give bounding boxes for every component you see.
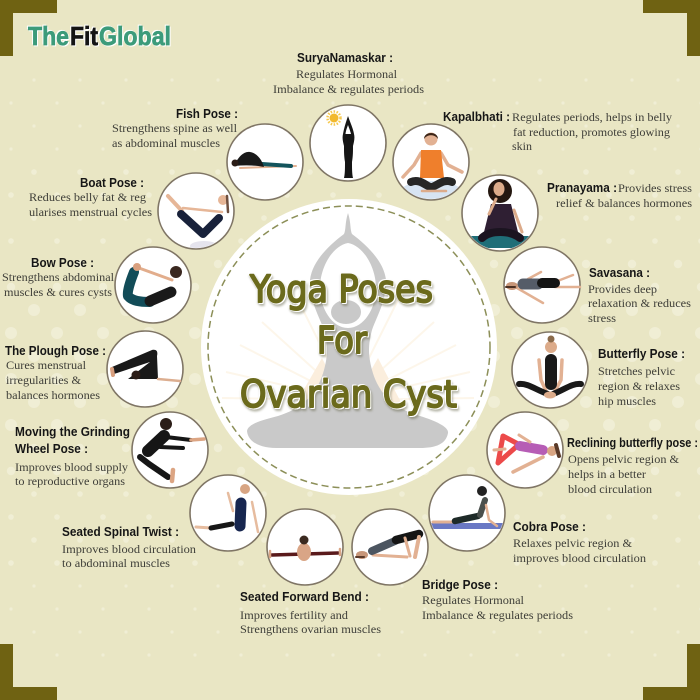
- text: Reduces belly fat & reg: [29, 190, 146, 204]
- text: Cures menstrual: [6, 358, 87, 372]
- icon: bow pose: [115, 247, 191, 323]
- panel: Seated Spinal Twist: [62, 475, 266, 570]
- title: Yoga Poses: [249, 268, 433, 311]
- title: For: [317, 319, 368, 362]
- logo: [28, 21, 171, 51]
- text: [15, 424, 130, 488]
- text: Wheel Pose :: [15, 441, 88, 456]
- text: Bow Pose :: [31, 255, 94, 270]
- central medallion: [201, 199, 497, 495]
- text: [598, 346, 685, 408]
- icon: pranayama: [462, 175, 538, 251]
- text: irregularities &: [6, 373, 82, 387]
- text: Provides stress: [618, 181, 692, 195]
- icon: seated spinal twist: [190, 475, 266, 551]
- icon: kapalbhati: [393, 124, 469, 200]
- text: Stretches pelvic: [598, 364, 675, 378]
- text: Improves blood circulation: [62, 542, 196, 556]
- text: SuryaNamaskar :: [297, 50, 393, 65]
- icon: seated forward bend: [267, 509, 343, 585]
- panel: Seated Forward Bend: [240, 509, 381, 636]
- text: Strengthens ovarian muscles: [240, 622, 381, 636]
- text: Opens pelvic region &: [568, 452, 680, 466]
- text: The Plough Pose :: [5, 343, 106, 358]
- text: [422, 577, 573, 622]
- text: Strengthens abdominal: [2, 270, 115, 284]
- text: Butterfly Pose :: [598, 346, 685, 361]
- icon: standing salute with sun: [310, 105, 386, 181]
- panel: SuryaNamaskar: [273, 50, 424, 181]
- text: Cobra Pose :: [513, 519, 586, 534]
- text: as abdominal muscles: [112, 136, 220, 150]
- text: balances hormones: [6, 388, 100, 402]
- panel: The Plough Pose: [5, 331, 183, 407]
- text: Imbalance & regulates periods: [422, 608, 573, 622]
- logo: Fit: [70, 21, 98, 51]
- logo: The: [28, 21, 69, 51]
- text: [29, 175, 152, 219]
- text: fat reduction, promotes glowing: [513, 125, 670, 139]
- text: [2, 255, 115, 299]
- title: Ovarian Cyst: [240, 373, 457, 416]
- text: [513, 519, 646, 565]
- text: [547, 180, 692, 210]
- text: Pranayama :: [547, 180, 617, 195]
- text: hip muscles: [598, 394, 656, 408]
- meditating silhouette: [247, 213, 448, 448]
- text: to reproductive organs: [15, 474, 125, 488]
- title: [240, 268, 457, 416]
- text: relief & balances hormones: [556, 196, 692, 210]
- sun rays: [222, 300, 474, 410]
- panel: Cobra Pose: [428, 475, 646, 565]
- text: [567, 435, 698, 496]
- text: relaxation & reduces: [588, 296, 691, 310]
- panel: Bridge Pose: [352, 509, 573, 622]
- text: Moving the Grinding: [15, 424, 130, 439]
- text: Imbalance & regulates periods: [273, 82, 424, 96]
- text: [588, 265, 691, 325]
- text: [112, 106, 238, 150]
- icon: fish pose: [227, 124, 303, 200]
- panel: Butterfly Pose: [512, 332, 685, 408]
- dashed ring: [208, 206, 490, 488]
- panel: Reclining butterfly pose: [487, 412, 698, 496]
- icon: reclining butterfly pose: [487, 412, 563, 488]
- logo: Global: [99, 21, 171, 51]
- text: Seated Spinal Twist :: [62, 524, 179, 539]
- text: improves blood circulation: [513, 551, 646, 565]
- text: [443, 109, 672, 153]
- text: [273, 50, 424, 96]
- text: Fish Pose :: [176, 106, 238, 121]
- text: helps in a better: [568, 467, 646, 481]
- icon: cobra pose: [428, 475, 508, 551]
- text: skin: [512, 139, 532, 153]
- text: Regulates periods, helps in belly: [512, 110, 672, 124]
- text: to abdominal muscles: [62, 556, 170, 570]
- text: Savasana :: [589, 265, 650, 280]
- icon: grinding wheel pose: [132, 412, 208, 488]
- text: Kapalbhati :: [443, 109, 510, 124]
- panel: Bow Pose: [2, 247, 191, 323]
- text: region & relaxes: [598, 379, 680, 393]
- panel: Moving the Grinding Wheel Pose: [15, 412, 208, 488]
- text: Regulates Hormonal: [422, 593, 525, 607]
- text: Bridge Pose :: [422, 577, 498, 592]
- icon: butterfly pose: [512, 332, 588, 408]
- text: stress: [588, 311, 616, 325]
- panel: Kapalbhati: [393, 109, 672, 200]
- text: [240, 589, 381, 636]
- text: muscles & cures cysts: [4, 285, 112, 299]
- icon: savasana: [504, 247, 580, 323]
- text: Regulates Hormonal: [296, 67, 398, 81]
- icon: bridge pose: [352, 509, 428, 585]
- panel: Boat Pose: [29, 173, 234, 251]
- text: [5, 343, 106, 402]
- icon: boat pose: [158, 173, 234, 251]
- text: Strengthens spine as well: [112, 121, 238, 135]
- text: Relaxes pelvic region &: [513, 536, 633, 550]
- panel: Savasana: [504, 247, 691, 325]
- text: Provides deep: [588, 282, 657, 296]
- text: Boat Pose :: [80, 175, 144, 190]
- text: Seated Forward Bend :: [240, 589, 369, 604]
- text: Improves blood supply: [15, 460, 128, 474]
- text: blood circulation: [568, 482, 652, 496]
- text: ularises menstrual cycles: [29, 205, 152, 219]
- text: [62, 524, 196, 570]
- icon: plough pose: [107, 331, 183, 407]
- panel: Pranayama: [462, 175, 692, 251]
- panel: Fish Pose: [112, 106, 303, 200]
- text: Improves fertility and: [240, 608, 348, 622]
